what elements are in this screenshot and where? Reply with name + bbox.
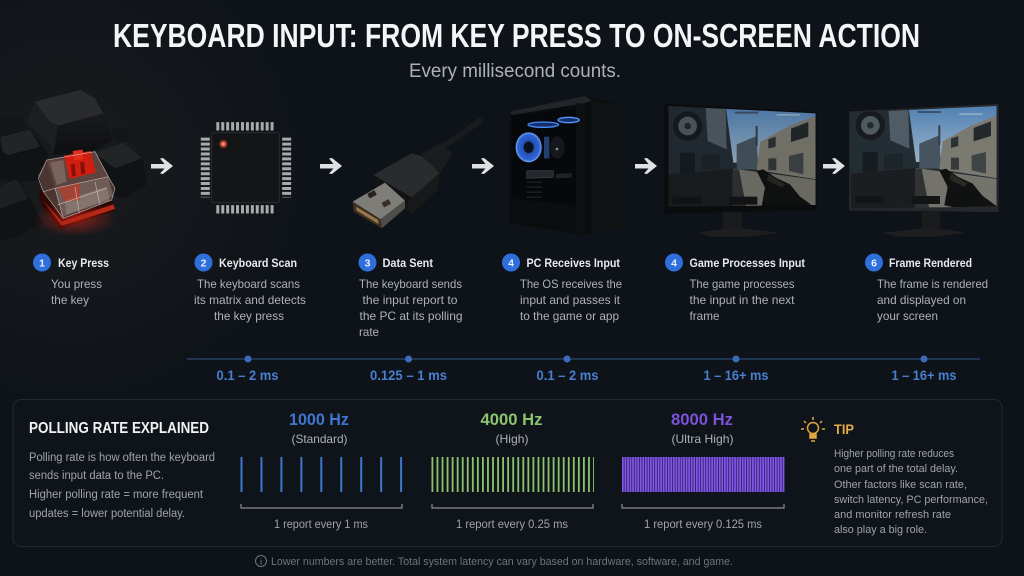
step 2: The keyboard scans (197, 277, 300, 291)
step 1: 1 (39, 258, 45, 270)
chart: 8000 Hz: 1 report every 0.125 ms (644, 519, 762, 531)
chart: 1000 Hz: 1 report every 1 ms (274, 519, 368, 531)
step 6 (865, 254, 988, 323)
chip pins top (216, 114, 275, 139)
step 3 (358, 254, 462, 339)
red stem (64, 151, 96, 179)
chip pins left (192, 138, 219, 197)
step 4: input and passes it (520, 293, 621, 307)
tip text: and monitor refresh rate (834, 509, 951, 521)
chart: 4000 Hz: 4000 Hz (480, 410, 542, 429)
panel: polling rate explained (13, 400, 1002, 546)
icon: monitor with game frame (664, 103, 819, 237)
step 3: The keyboard sends (359, 277, 462, 291)
tip text: switch latency, PC performance, (834, 494, 988, 506)
icon: controller chip (205, 126, 287, 209)
footer note: i (260, 558, 262, 566)
step 2: the key press (214, 309, 284, 323)
arrow 4 (635, 158, 657, 174)
polling description: Higher polling rate = more frequent (29, 489, 204, 501)
arrow 2 (320, 158, 342, 174)
step 3: the PC at its polling (360, 309, 462, 323)
latency timeline: 0.1 – 2 ms (216, 368, 278, 383)
chart: 1000 Hz: 1000 Hz (289, 410, 349, 429)
step 5: The game processes (690, 277, 794, 291)
step 1: Key Press (58, 256, 109, 270)
chart: 8000 Hz (622, 410, 784, 531)
arrow 1 (151, 158, 173, 174)
footer note: Lower numbers are better. Total system latency can vary based on hardware, software, and game. (271, 556, 733, 568)
step 6: The frame is rendered (877, 277, 988, 291)
chip pins right (273, 138, 300, 197)
chart: 1000 Hz: (Standard) (292, 432, 348, 446)
latency timeline: 1 – 16+ ms (892, 368, 956, 383)
tip text (834, 448, 988, 536)
step 2 (194, 254, 306, 323)
tip text: one part of the total delay. (834, 463, 958, 475)
latency timeline: 0.1 – 2 ms (536, 368, 598, 383)
step 4: to the game or app (520, 309, 619, 323)
status LED (219, 139, 228, 149)
tip heading: TIP (834, 422, 854, 437)
step 6: your screen (877, 309, 938, 323)
step 6: Frame Rendered (889, 256, 972, 270)
step 4 (502, 254, 622, 323)
heading: polling rate: POLLING RATE EXPLAINED (29, 420, 209, 437)
chart: 4000 Hz (432, 410, 594, 531)
latency timeline: 1 – 16+ ms (704, 368, 768, 383)
polling description (29, 452, 215, 520)
polling description: Polling rate is how often the keyboard (29, 452, 215, 464)
step 5 (665, 254, 805, 323)
step 4: The OS receives the (520, 277, 622, 291)
icon: mechanical key switch (0, 90, 147, 242)
step 1: the key (51, 293, 89, 307)
step 2: 2 (201, 258, 207, 270)
tip text: also play a big role. (834, 524, 927, 536)
chart: 8000 Hz: (Ultra High) (672, 432, 734, 446)
step 6: 6 (871, 258, 877, 270)
polling description: sends input data to the PC. (29, 470, 164, 482)
step 3: Data Sent (382, 256, 433, 270)
step 1: You press (51, 277, 102, 291)
step 5: the input in the next (690, 293, 795, 307)
arrow 3 (472, 158, 494, 174)
chart: 4000 Hz: (High) (496, 432, 529, 446)
step 5: 4 (671, 258, 677, 270)
step 3: the input report to (362, 293, 458, 307)
icon: PC tower (510, 96, 623, 235)
subtitle: Every millisecond counts. (409, 61, 621, 82)
tip text: Other factors like scan rate, (834, 479, 967, 491)
step 3: rate (359, 325, 379, 339)
red glow (33, 200, 117, 237)
chart: 8000 Hz: 8000 Hz (671, 410, 733, 429)
icon: monitor with rendered frame (849, 104, 1002, 237)
latency timeline: 0.125 – 1 ms (370, 368, 447, 383)
icon: light bulb (801, 417, 825, 441)
step 2: its matrix and detects (194, 293, 306, 307)
step 5: frame (690, 309, 720, 323)
arrow 5 (823, 158, 845, 174)
tip text: Higher polling rate reduces (834, 448, 954, 460)
clear switch housing (38, 152, 115, 218)
step 5: Game Processes Input (690, 256, 805, 270)
case fans (516, 117, 579, 162)
step 2: Keyboard Scan (219, 256, 297, 270)
latency timeline (187, 356, 980, 383)
step 4: 4 (508, 258, 514, 270)
chart: 1000 Hz (240, 410, 403, 531)
polling description: updates = lower potential delay. (29, 508, 185, 520)
chip pins bottom (216, 197, 275, 222)
step 6: and displayed on (877, 293, 966, 307)
chart: 4000 Hz: 1 report every 0.25 ms (456, 519, 568, 531)
step 3: 3 (365, 258, 371, 270)
step 4: PC Receives Input (526, 256, 620, 270)
step 1 (33, 254, 109, 307)
icon: USB connector (353, 121, 480, 228)
